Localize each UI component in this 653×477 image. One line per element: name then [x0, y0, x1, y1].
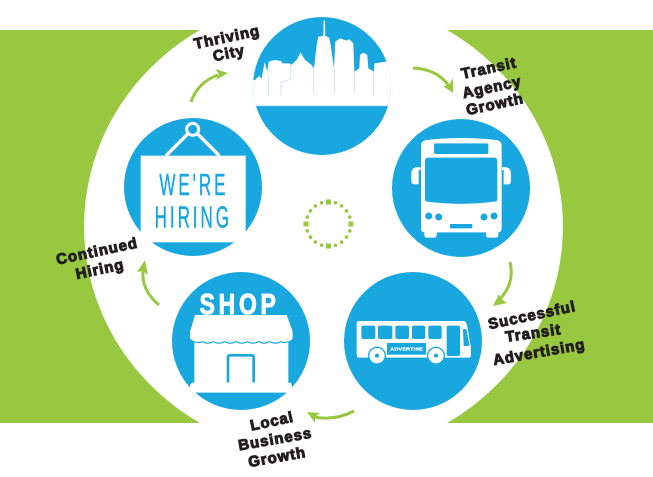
arrow: agency to advertising [493, 262, 511, 306]
shop text: SHOP [200, 290, 280, 321]
arrow: hiring to city [191, 69, 228, 102]
label: transit agency growth [460, 54, 525, 119]
label: continued hiring: Hiring [74, 256, 126, 283]
arrow: city to transit agency [413, 68, 453, 93]
label: successful transit advertising: Successful [487, 298, 577, 333]
label: transit agency growth: Agency [461, 73, 523, 102]
label: local business growth [237, 409, 313, 471]
center dotted ring [304, 199, 354, 248]
white central ellipse [84, 30, 563, 423]
hiring text: we're: WE'RE [159, 168, 228, 202]
icon: we're hiring sign [124, 118, 262, 256]
label: transit agency growth: Transit [460, 54, 518, 83]
label: local business growth: Growth [247, 444, 308, 471]
label: local business growth: Local [249, 409, 295, 435]
hiring text: hiring: HIRING [155, 200, 232, 235]
label: transit agency growth: Growth [465, 90, 525, 119]
label: successful transit advertising: Transit [504, 321, 562, 346]
arrow: local business to hiring [137, 260, 159, 305]
label: local business growth: Business [237, 425, 313, 454]
advertise label: ADVERTISE [390, 346, 424, 352]
icon: shop storefront [172, 272, 310, 410]
icon: city skyline [252, 17, 393, 155]
label: thriving city: Thriving [192, 22, 262, 53]
label: successful transit advertising [487, 298, 587, 369]
icon: bus front [392, 119, 530, 257]
arrow: advertising to local business [307, 411, 354, 423]
label: successful transit advertising: Advertising [492, 336, 587, 369]
label: thriving city: City [211, 42, 247, 65]
icon: bus with advertising [344, 272, 482, 410]
label: continued hiring: Continued [55, 235, 140, 269]
